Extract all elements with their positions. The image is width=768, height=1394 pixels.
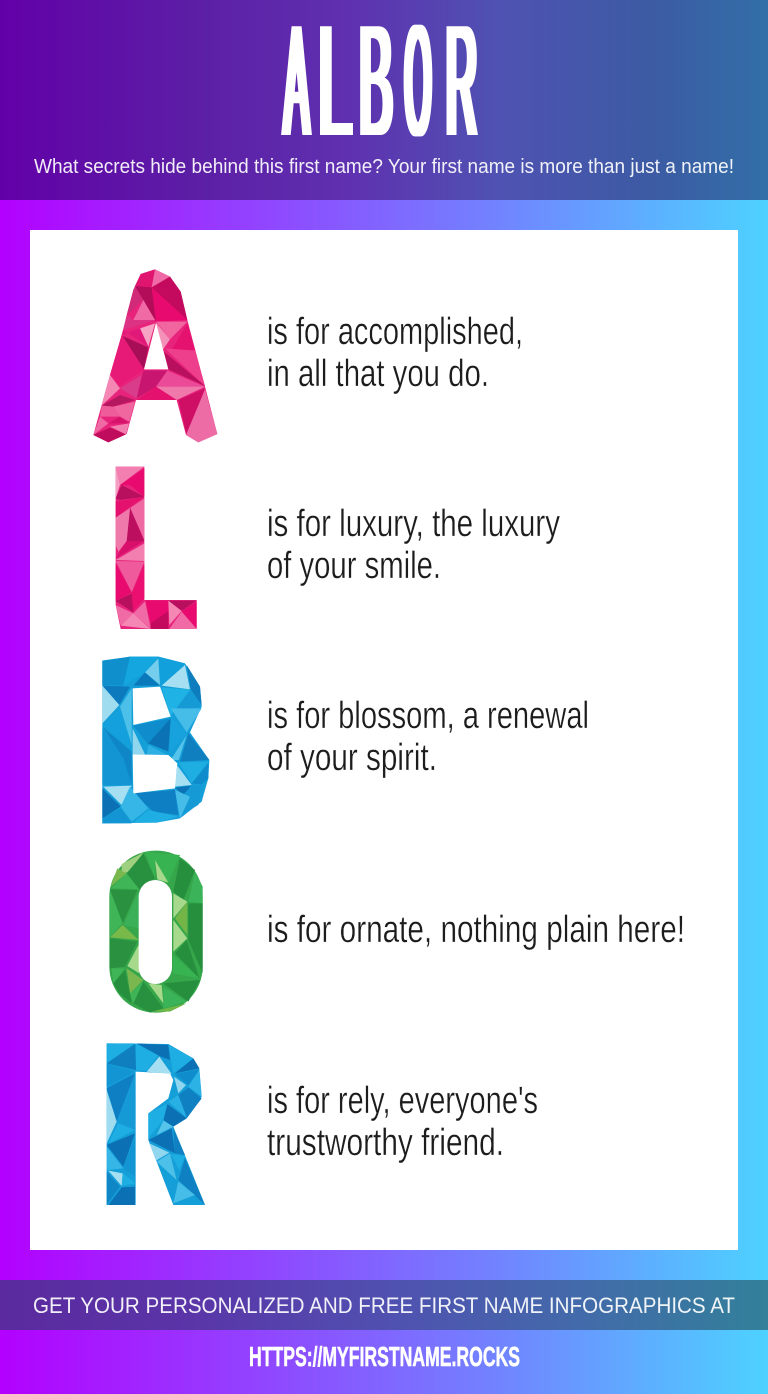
icon: polygon letter O (109, 851, 203, 1013)
text: B line: of your spirit. (267, 737, 437, 779)
text: B line: is for blossom, a renewal (267, 695, 589, 737)
text: R line: trustworthy friend. (267, 1122, 504, 1164)
title (284, 0, 477, 169)
text: A line (267, 311, 523, 395)
text: R line (267, 1080, 538, 1164)
text: L line: is for luxury, the luxury (267, 503, 560, 545)
footer link: HTTPS://MYFIRSTNAME.ROCKS (249, 1341, 520, 1372)
subtitle: What secrets hide behind this first name? Your first name is more than just a name! (34, 156, 734, 178)
text: L line (267, 503, 560, 587)
text: A line: is for accomplished, (267, 311, 523, 353)
white content panel (30, 230, 738, 1250)
text: A line: in all that you do. (267, 353, 489, 395)
icon: polygon letter B (102, 657, 209, 823)
footer band (0, 1280, 768, 1330)
icon: polygon letter R (107, 1043, 205, 1205)
header panel (0, 0, 768, 200)
icon: polygon letter A (93, 269, 217, 442)
icon: polygon letter L (116, 467, 197, 629)
text: L line: of your smile. (267, 545, 441, 587)
text: R line: is for rely, everyone's (267, 1080, 538, 1122)
text: B line (267, 695, 589, 779)
footer call to action: GET YOUR PERSONALIZED AND FREE FIRST NAME INFOGRAPHICS AT (33, 1293, 735, 1318)
